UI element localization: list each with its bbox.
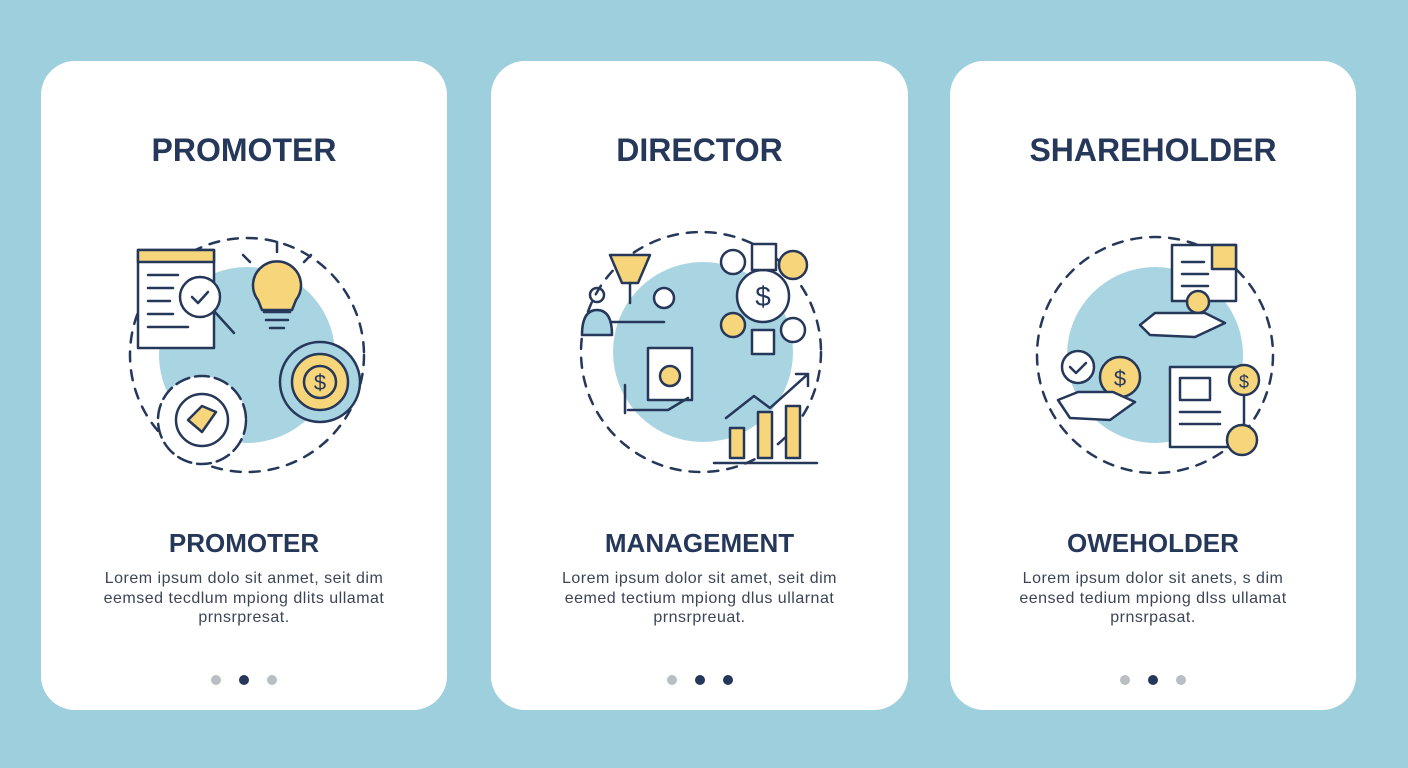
text block: management: prnsrpreuat. <box>653 609 746 626</box>
text block: promoter: Lorem ipsum dolo sit anmet, seit dim <box>105 570 383 587</box>
subtitle: oweholder: OWEHOLDER <box>1067 528 1239 558</box>
text block: oweholder: prnsrpasat. <box>1110 609 1196 626</box>
panel: shareholder <box>950 61 1356 710</box>
text block: promoter: prnsrpresat. <box>198 609 290 626</box>
panel: director <box>491 61 908 710</box>
heading: director: DIRECTOR <box>616 132 783 168</box>
icon: shareholder illustration: $ <box>1114 366 1126 391</box>
text block: oweholder: eensed tedium mpiong dlss ullamat <box>1019 590 1287 606</box>
text block: promoter: eemsed tecdlum mpiong dlits ullamat <box>104 590 384 606</box>
panel: promoter <box>41 61 447 710</box>
pagination dots <box>211 675 277 685</box>
subtitle: promoter: PROMOTER <box>169 528 319 558</box>
icon: shareholder illustration <box>1036 236 1274 474</box>
text block: management: eemed tectium mpiong dlus ullarnat <box>565 590 834 606</box>
text block: management <box>562 570 837 626</box>
text block: promoter <box>104 570 384 626</box>
text block: oweholder: Lorem ipsum dolor sit anets, s dim <box>1023 570 1283 587</box>
icon: director illustration: $ <box>755 281 771 312</box>
text block: management: Lorem ipsum dolor sit amet, seit dim <box>562 570 837 587</box>
pagination dots <box>667 675 733 685</box>
icon: promoter illustration: $ <box>314 370 326 395</box>
heading: shareholder: SHAREHOLDER <box>1029 132 1277 168</box>
heading: promoter: PROMOTER <box>152 132 336 168</box>
icon: promoter illustration <box>128 236 366 474</box>
subtitle: management: MANAGEMENT <box>605 528 794 558</box>
icon: director illustration <box>580 230 822 474</box>
icon: shareholder illustration: $ <box>1239 372 1249 392</box>
pagination dots <box>1120 675 1186 685</box>
text block: oweholder <box>1019 570 1287 626</box>
